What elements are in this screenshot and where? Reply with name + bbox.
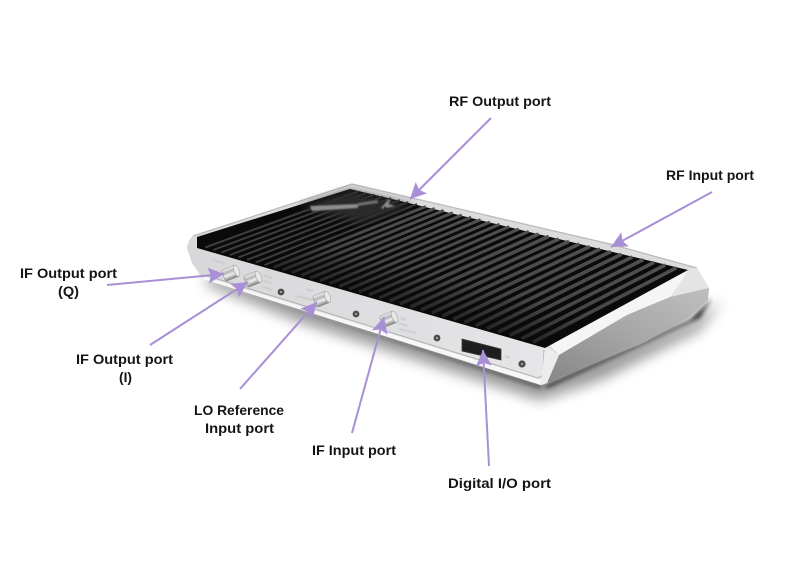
label: IF Output port (Q): (Q): [58, 283, 79, 299]
heat sink fins, centre group: [274, 206, 529, 298]
device shadow: [205, 275, 722, 400]
label: IF Output port (I): [76, 351, 173, 385]
front face: [187, 236, 547, 385]
arrow: IF Input port: [352, 317, 384, 433]
connector: IF Output Q: [221, 264, 241, 282]
front face lower lip: [203, 276, 541, 385]
heat sink fins, right group: [390, 234, 676, 342]
front corner facet: [541, 346, 559, 385]
arrow: IF Output port I: [150, 282, 248, 345]
device body: [187, 184, 709, 385]
arrow: LO Reference Input port: [240, 302, 317, 389]
arrow: IF Output port Q: [107, 274, 224, 285]
arrow: Digital I/O port: [483, 350, 489, 466]
label: LO Reference Input port: LO Reference: [194, 402, 284, 418]
label: Digital I/O port: Digital I/O port: [448, 475, 551, 491]
logo on apex: [300, 191, 412, 222]
arrow: RF Input port: [611, 192, 712, 247]
heat sink fins, left group: [205, 192, 417, 265]
arrow: RF Output port: [410, 118, 491, 199]
heat sink top: [197, 189, 688, 348]
indicator holes: [278, 289, 526, 368]
device: [187, 184, 722, 400]
connector: LO Reference Input: [312, 290, 332, 308]
panel edge line: [205, 275, 544, 378]
label: IF Output port (Q): IF Output port: [20, 265, 117, 281]
top rim highlight: [193, 184, 697, 268]
label: RF Input port: RF Input port: [666, 167, 754, 183]
side face: [547, 288, 709, 383]
right corner facet: [670, 268, 709, 297]
label: IF Output port (I): (I): [119, 369, 132, 385]
right bevel strip: [545, 268, 709, 355]
connector: IF Input: [379, 310, 399, 328]
label: LO Reference Input port: [194, 402, 284, 436]
faceplate markings: [213, 260, 510, 358]
label: IF Input port: IF Input port: [312, 442, 396, 458]
connector: IF Output I: [243, 270, 263, 288]
label: RF Output port: RF Output port: [449, 93, 551, 109]
label: IF Output port (I): IF Output port: [76, 351, 173, 367]
label: IF Output port (Q): [20, 265, 117, 299]
digital I/O connector: [462, 339, 501, 360]
label: LO Reference Input port: Input port: [205, 420, 274, 436]
